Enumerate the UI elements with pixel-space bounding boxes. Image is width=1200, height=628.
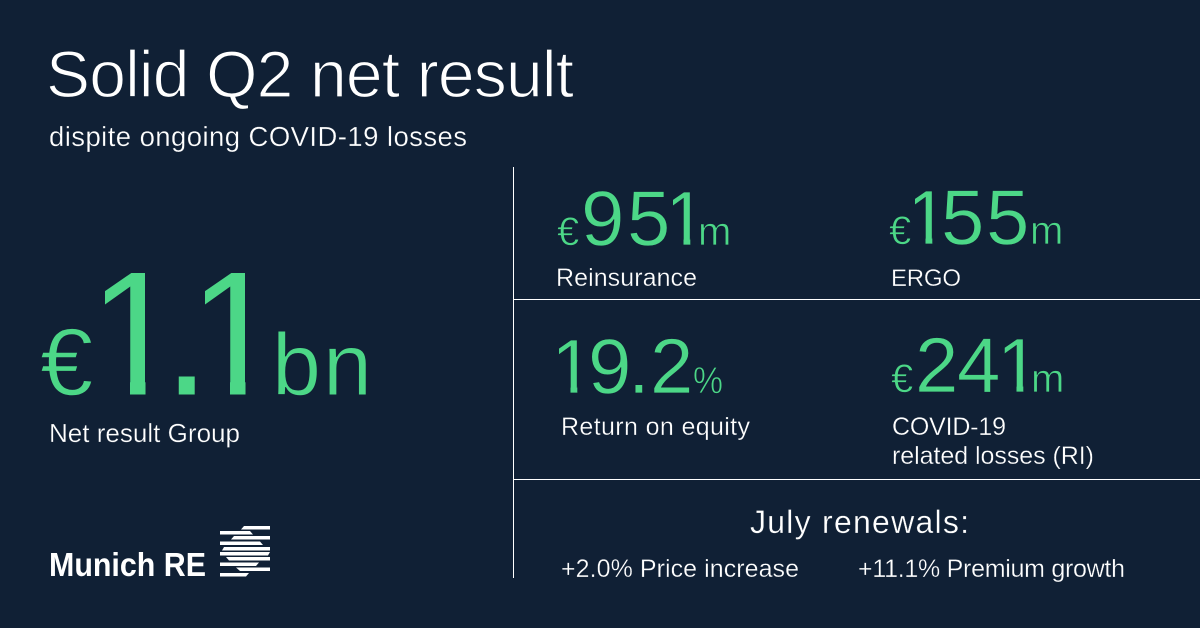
metric: COVID-19 losses: COVID-19 — [892, 413, 1006, 441]
metric: return on equity: 9.2 — [588, 322, 693, 410]
metric: reinsurance: 95 — [581, 174, 670, 262]
metric: reinsurance: € — [557, 210, 579, 254]
metric: ERGO: 1 — [906, 175, 949, 261]
title: Solid Q2 net result — [46, 37, 574, 111]
metric: COVID-19 losses: € — [891, 357, 913, 401]
metric: ERGO: m — [1030, 209, 1063, 253]
metric: reinsurance: Reinsurance — [556, 264, 697, 292]
metric: COVID-19 losses — [892, 338, 1092, 469]
value: 1.1 bn: . — [162, 234, 211, 433]
metric: COVID-19 losses: m — [1031, 357, 1064, 401]
value: 1.1 bn — [42, 273, 366, 396]
price increase: +2.0% Price increase — [561, 555, 799, 583]
value: 1.1 bn: € — [40, 309, 93, 416]
metric: return on equity: Return on equity — [561, 413, 750, 441]
metric: ERGO — [890, 190, 1060, 286]
metric: COVID-19 losses: 24 — [915, 321, 1000, 409]
metric: COVID-19 losses: related losses (RI) — [892, 442, 1094, 470]
metric: reinsurance: m — [698, 210, 731, 254]
metric: ERGO: € — [889, 209, 911, 253]
metric: reinsurance — [558, 191, 728, 286]
icon: striped emblem — [220, 526, 270, 576]
July renewals heading: July renewals: — [750, 504, 969, 540]
main metric: net result group — [42, 273, 366, 448]
label: Net result Group — [49, 418, 240, 448]
logo: Munich RE — [49, 526, 270, 583]
wordmark: Munich RE — [49, 546, 206, 583]
value: 1.1 bn: 1 — [85, 234, 184, 433]
subtitle: dispite ongoing COVID-19 losses — [49, 121, 467, 152]
value: 1.1 bn: bn — [272, 315, 372, 414]
metric: reinsurance: 1 — [664, 176, 707, 262]
metric: return on equity — [559, 338, 750, 440]
value: 1.1 bn: 1 — [185, 234, 284, 433]
metric: return on equity: % — [693, 360, 723, 402]
metric: COVID-19 losses: 1 — [997, 323, 1040, 409]
premium growth: +11.1% Premium growth — [858, 555, 1125, 583]
metric: return on equity: 1 — [551, 324, 594, 410]
metric: ERGO: ERGO — [891, 265, 961, 292]
metric: ERGO: 55 — [941, 173, 1029, 261]
